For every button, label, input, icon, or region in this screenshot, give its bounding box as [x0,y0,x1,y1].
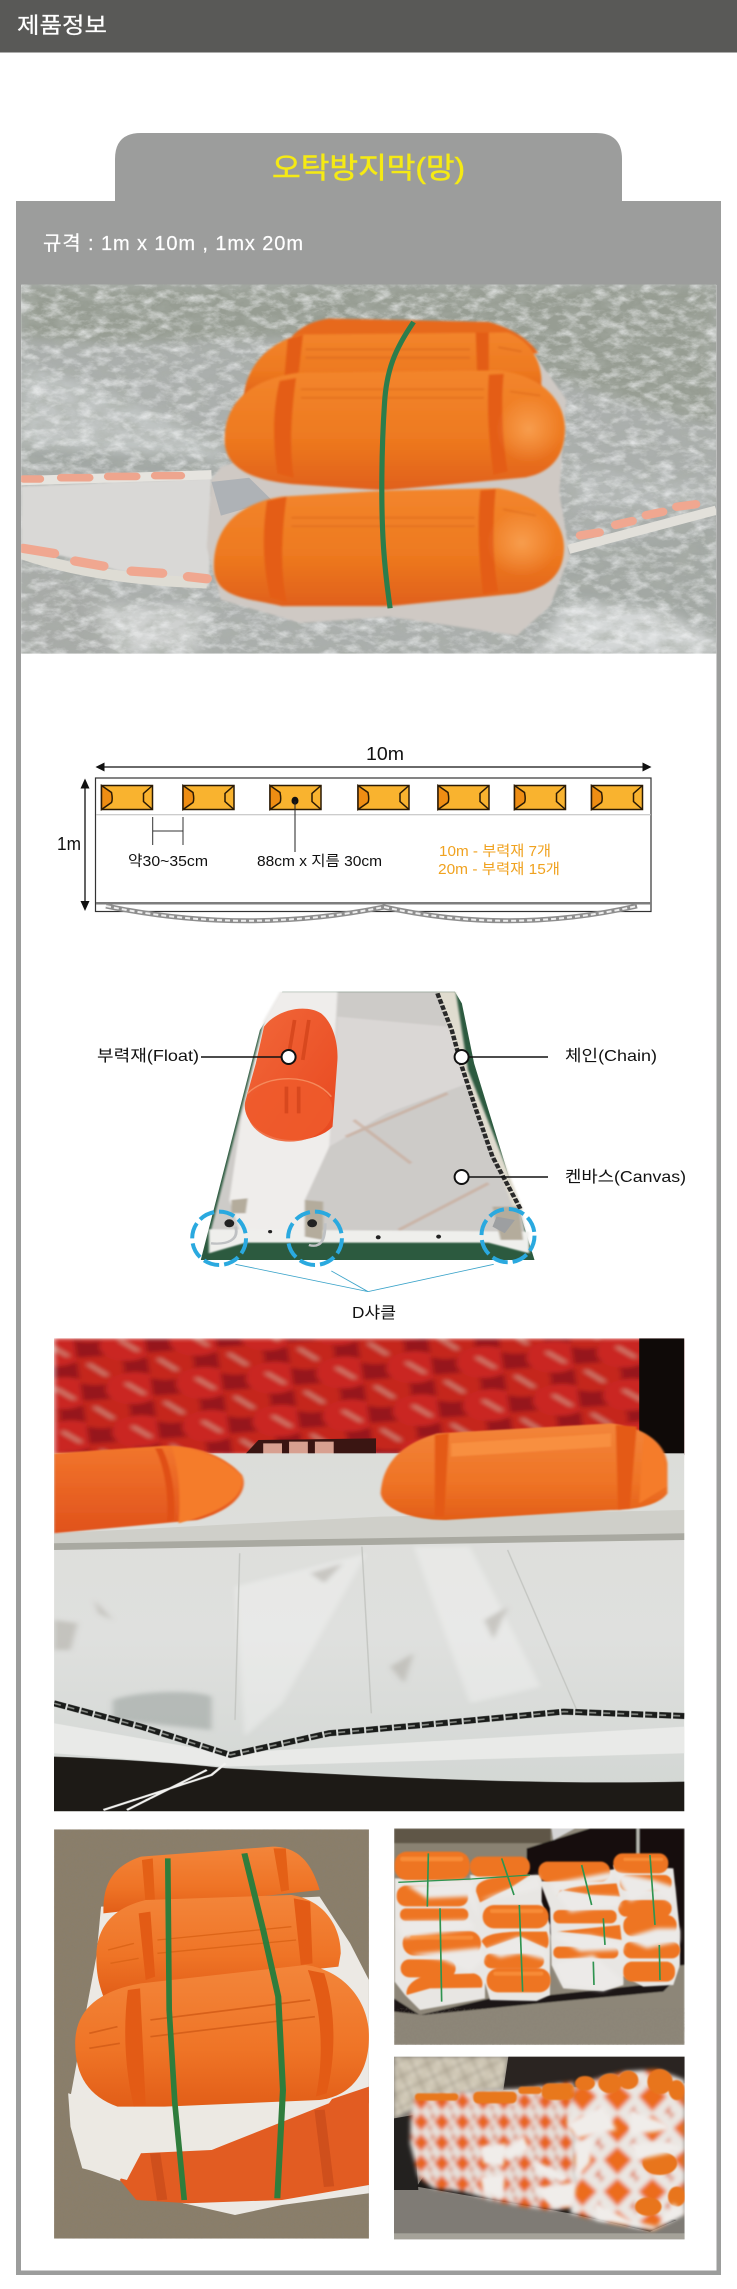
large-diamond wrapped stack [567,2069,685,2230]
green strap [382,322,414,608]
fourth float [120,2087,369,2203]
small-diamond wrapped stack [410,2082,577,2210]
diagram: float layout [57,744,652,921]
float [245,1009,338,1142]
green straps [398,1853,660,2002]
orange rounded tops [575,2069,685,2216]
dimension arrow: 1m [80,778,90,911]
dark doorway [503,2057,685,2090]
photo: pallet stacks of floats [394,1828,685,2045]
dark wall base [394,2115,418,2190]
grey cloth fold [212,478,273,516]
right float [381,1423,667,1520]
green ground [201,992,535,1260]
gap between floats [246,1438,376,1454]
float highlights [400,1857,663,1976]
white wrapping silhouettes [395,1865,680,2010]
top float [103,1847,320,1913]
callout: chain: 체인(Chain) [565,1047,657,1065]
label: 10m: 10m [366,744,404,764]
chains [106,906,637,921]
photo: unfolded barrier with callouts [97,992,686,1322]
photo: strapped float bundle [54,1829,369,2239]
D-shackle leader lines [235,1264,494,1292]
orange floats [395,1852,680,1995]
label: 1m: 1m [57,834,81,854]
chain [54,1703,684,1755]
booms in the water [21,475,716,583]
shackles [211,1217,515,1246]
left float [54,1446,244,1533]
photo: floats and canvas close-up [54,1338,684,1811]
pallet shadow [417,2177,677,2232]
header bar: 제품정보: 제품정보 [17,13,107,38]
white fold highlights [480,2105,685,2230]
canvas sheet [209,992,529,1253]
lower float [214,488,564,606]
white cloth band [68,2093,336,2180]
rope [103,1763,226,1810]
white cloth folds [397,1872,679,1991]
snow texture [21,285,716,654]
title: 오탁방지막(망): 오탁방지막(망) [272,153,465,185]
label: float size: 88cm x 지름 30cm [257,853,382,870]
stone wall [394,2057,508,2118]
middle float [225,370,565,490]
blurred riverbank tones [21,285,716,654]
orange tops [415,2083,575,2103]
green straps [168,1853,283,2200]
photo: packed floats on riverbank [21,285,716,654]
callout: canvas: 켄바스(Canvas) [565,1168,686,1186]
hem grommets [224,1219,441,1239]
ground texture [394,2008,685,2045]
canvas sheet [54,1453,684,1787]
callout: float [97,1047,296,1065]
dimension arrow: 10m [96,762,652,772]
white canvas wrap [207,349,570,636]
callout: D shackle: D샤클 [352,1304,396,1322]
photo: large wrapped stack [394,2057,685,2239]
header bar: 제품정보 [0,0,737,52]
stacked crates [263,1442,334,1454]
callout: chain [455,1047,657,1065]
spacing bracket [153,817,183,845]
D-shackle dashed circles [192,1209,535,1265]
note: float counts [438,843,560,878]
bank texture [21,285,716,654]
note: float counts: 10m - 부력재 7개 [439,843,551,860]
chain [437,993,521,1210]
floats row [102,786,642,810]
white wrapping behind [71,1897,369,2215]
specification text: 규격 : 1m x 10m , 1mx 20m [43,232,303,255]
float leader [292,797,298,852]
note: float counts: 20m - 부력재 15개 [438,861,560,878]
river water [21,478,212,587]
callout: canvas [455,1168,686,1186]
callout: float: 부력재(Float) [97,1047,199,1065]
front float [75,1965,369,2107]
ground strip [394,2233,685,2239]
black ground [54,1757,684,1811]
label: spacing: 약30~35cm [128,853,208,870]
second float [96,1895,341,1997]
black corner [639,1338,684,1455]
back float [244,319,541,400]
